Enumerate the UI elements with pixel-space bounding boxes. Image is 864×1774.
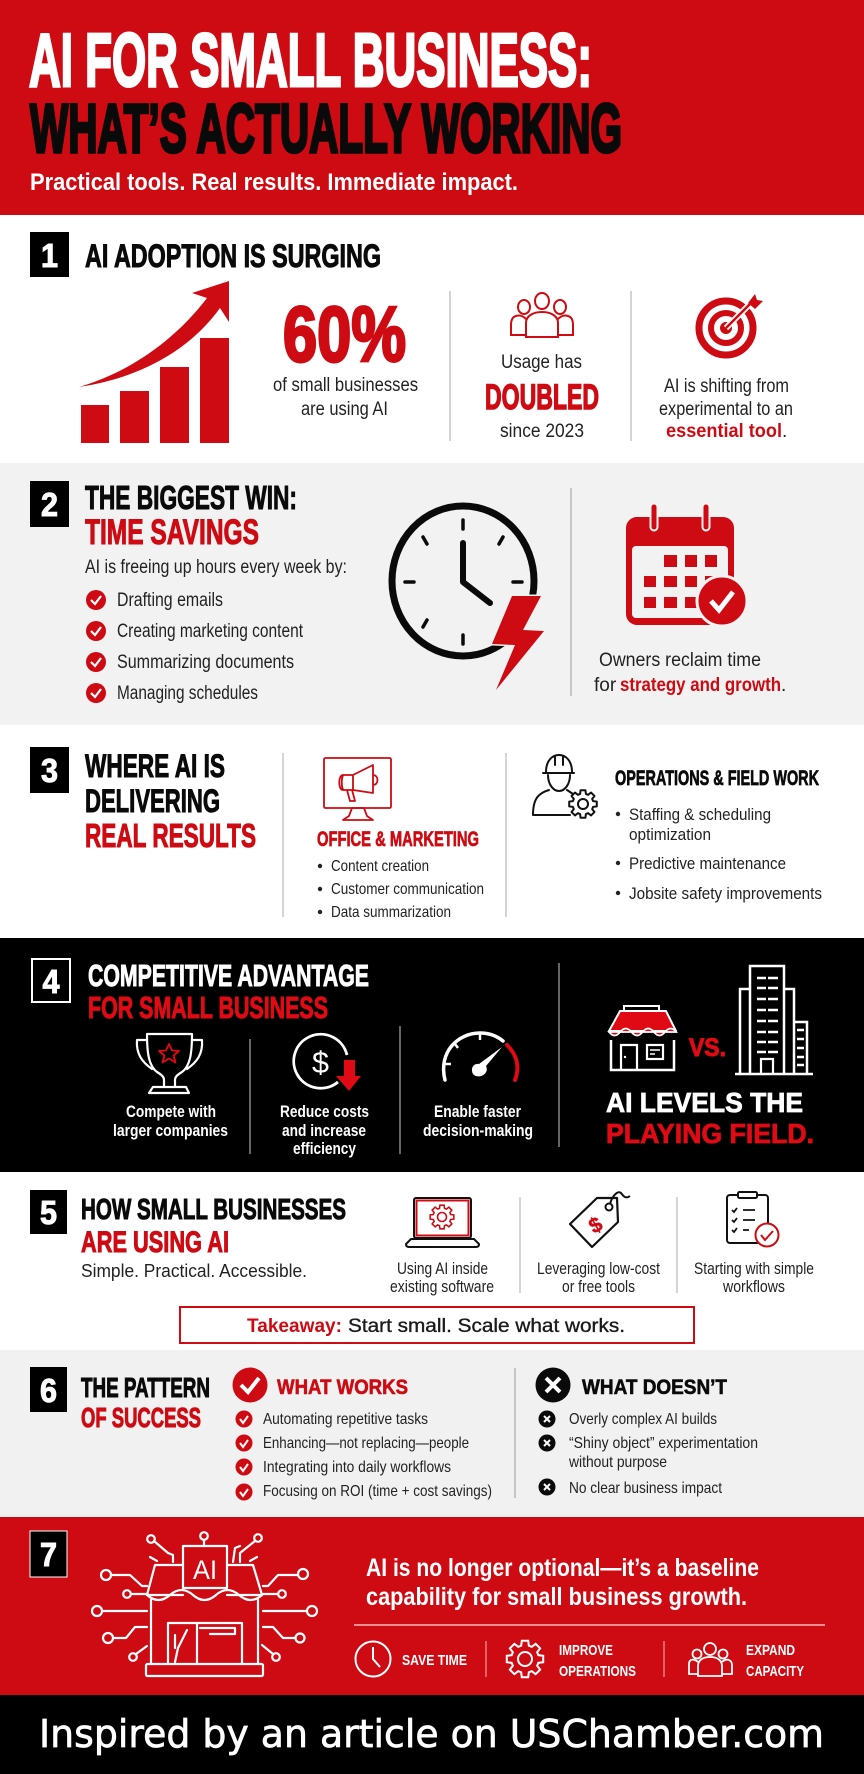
office and marketing: Content creation bbox=[331, 858, 429, 875]
stat doubled bbox=[485, 352, 599, 442]
caption: Owners reclaim time bbox=[599, 650, 761, 671]
what works list: Automating repetitive tasks bbox=[263, 1411, 428, 1428]
stat doubled: DOUBLED bbox=[485, 378, 599, 417]
caption low-cost tools: or free tools bbox=[562, 1277, 635, 1296]
icon: clipboard bbox=[727, 1192, 778, 1246]
heading: COMPETITIVE ADVANTAGE bbox=[88, 958, 369, 993]
stat 60%: of small businesses bbox=[273, 375, 418, 396]
badge 2: 2 bbox=[41, 486, 58, 523]
panel: section 6 pattern of success bbox=[0, 1350, 864, 1517]
caption: strategy and growth bbox=[620, 675, 781, 696]
what doesn't header: WHAT DOESN’T bbox=[582, 1376, 727, 1399]
badge 1: 1 bbox=[41, 237, 58, 274]
message bbox=[366, 1554, 759, 1611]
caption low-cost tools bbox=[537, 1259, 660, 1296]
stat essential tool: essential tool bbox=[666, 421, 782, 442]
subtitle: Practical tools. Real results. Immediate impact. bbox=[30, 169, 518, 196]
heading: THE PATTERN bbox=[81, 1372, 210, 1403]
what works list bbox=[236, 1410, 492, 1500]
icon: AI storefront circuit bbox=[92, 1532, 317, 1676]
operations and field work: optimization bbox=[629, 825, 711, 844]
what works list: Integrating into daily workflows bbox=[263, 1459, 451, 1476]
badge 6 bbox=[30, 1367, 67, 1412]
what doesn't list: without purpose bbox=[568, 1454, 667, 1471]
heading: TIME SAVINGS bbox=[85, 513, 259, 552]
icon: price tag bbox=[570, 1192, 630, 1247]
stat 60%: are using AI bbox=[301, 399, 388, 420]
icon: save time clock bbox=[356, 1642, 390, 1676]
panel: section 1 adoption bbox=[30, 232, 793, 443]
icon: worker with gear bbox=[533, 755, 597, 818]
panel: footer bbox=[0, 1695, 864, 1774]
heading: HOW SMALL BUSINESSES bbox=[81, 1194, 346, 1226]
checklist: Creating marketing content bbox=[117, 621, 304, 642]
panel: section 5 how businesses use AI bbox=[30, 1190, 814, 1343]
heading bbox=[88, 958, 369, 1025]
benefit compete: Compete with bbox=[126, 1102, 216, 1121]
message: capability for small business growth. bbox=[366, 1583, 747, 1611]
checklist bbox=[86, 590, 304, 704]
callout levels the field: PLAYING FIELD. bbox=[606, 1118, 814, 1149]
badge 7: 7 bbox=[40, 1536, 57, 1573]
stat doubled: since 2023 bbox=[500, 421, 584, 442]
icon: monitor megaphone bbox=[324, 758, 391, 820]
icon: clock with lightning bbox=[392, 506, 544, 690]
benefit faster decisions bbox=[423, 1102, 533, 1140]
caption software: Using AI inside bbox=[397, 1259, 488, 1278]
label expand capacity bbox=[746, 1642, 804, 1680]
label save time: SAVE TIME bbox=[402, 1652, 467, 1669]
label improve operations: OPERATIONS bbox=[559, 1663, 636, 1680]
stat essential tool: . bbox=[782, 421, 787, 442]
takeaway box bbox=[180, 1307, 694, 1343]
heading: ARE USING AI bbox=[81, 1226, 229, 1259]
icon: price tag: $ bbox=[585, 1213, 607, 1238]
operations and field work: Jobsite safety improvements bbox=[629, 884, 822, 903]
stat doubled: Usage has bbox=[501, 352, 582, 373]
vs label: VS. bbox=[689, 1034, 726, 1062]
heading bbox=[85, 748, 256, 854]
benefit reduce costs: and increase bbox=[282, 1121, 366, 1140]
stat 60%: 60% bbox=[283, 290, 406, 378]
badge 4 bbox=[32, 959, 70, 1002]
operations and field work bbox=[615, 767, 822, 903]
what works list: Focusing on ROI (time + cost savings) bbox=[263, 1483, 492, 1500]
operations and field work: Predictive maintenance bbox=[629, 854, 786, 873]
takeaway box: Start small. Scale what works. bbox=[348, 1316, 625, 1337]
intro text: AI is freeing up hours every week by: bbox=[85, 557, 347, 578]
benefit reduce costs bbox=[280, 1102, 369, 1158]
badge 7 bbox=[30, 1531, 67, 1577]
heading: DELIVERING bbox=[85, 783, 220, 819]
takeaway box: Takeaway: bbox=[247, 1316, 342, 1337]
heading bbox=[81, 1372, 210, 1433]
heading: REAL RESULTS bbox=[85, 817, 256, 854]
caption software bbox=[390, 1259, 494, 1296]
stat essential tool: experimental to an bbox=[659, 399, 793, 420]
icon: dollar down: $ bbox=[312, 1045, 329, 1080]
heading bbox=[85, 479, 297, 552]
icon: storefront bbox=[609, 1006, 676, 1070]
label improve operations: IMPROVE bbox=[559, 1642, 613, 1659]
checklist: Drafting emails bbox=[117, 590, 223, 611]
operations and field work: Staffing & scheduling bbox=[629, 805, 771, 824]
tagline: Simple. Practical. Accessible. bbox=[81, 1261, 307, 1281]
office and marketing bbox=[317, 828, 484, 921]
caption: . bbox=[781, 675, 786, 696]
heading: AI ADOPTION IS SURGING bbox=[85, 238, 381, 274]
badge 2 bbox=[30, 481, 69, 527]
badge 6: 6 bbox=[40, 1372, 57, 1409]
label expand capacity: CAPACITY bbox=[746, 1663, 804, 1680]
what doesn't list: Overly complex AI builds bbox=[569, 1411, 717, 1428]
heading bbox=[81, 1194, 346, 1259]
icon: target bbox=[699, 294, 763, 355]
benefit compete: larger companies bbox=[113, 1121, 228, 1140]
what works list: Enhancing—not replacing—people bbox=[263, 1435, 469, 1452]
icon: AI storefront circuit: AI bbox=[193, 1555, 217, 1585]
message: AI is no longer optional—it’s a baseline bbox=[366, 1554, 759, 1582]
icon: expand capacity people bbox=[689, 1643, 732, 1676]
icon: office tower bbox=[735, 966, 813, 1074]
what works header bbox=[232, 1368, 408, 1402]
heading: WHERE AI IS bbox=[85, 748, 225, 784]
office and marketing: OFFICE & MARKETING bbox=[317, 828, 479, 851]
caption simple workflows: Starting with simple bbox=[694, 1259, 814, 1278]
benefit reduce costs: efficiency bbox=[293, 1139, 356, 1158]
stat 60% bbox=[273, 290, 418, 420]
callout levels the field bbox=[606, 1087, 814, 1149]
benefit faster decisions: Enable faster bbox=[434, 1102, 521, 1121]
caption software: existing software bbox=[390, 1277, 494, 1296]
icon: improve gear bbox=[507, 1641, 543, 1677]
badge 5: 5 bbox=[40, 1194, 57, 1231]
icon: calendar bbox=[626, 507, 747, 626]
what doesn't list bbox=[538, 1410, 758, 1497]
callout levels the field: AI LEVELS THE bbox=[606, 1087, 803, 1118]
heading: THE BIGGEST WIN: bbox=[85, 479, 297, 516]
panel: section 4 competitive advantage bbox=[0, 938, 864, 1172]
benefit reduce costs: Reduce costs bbox=[280, 1102, 369, 1121]
icon: dollar down bbox=[294, 1034, 361, 1091]
panel: section 2 time savings bbox=[0, 463, 864, 725]
footer credit: Inspired by an article on USChamber.com bbox=[39, 1712, 824, 1756]
caption simple workflows bbox=[694, 1259, 814, 1296]
what works header: WHAT WORKS bbox=[277, 1376, 408, 1399]
stat essential tool bbox=[659, 376, 793, 442]
office and marketing: Data summarization bbox=[331, 904, 451, 921]
checklist: Summarizing documents bbox=[117, 652, 294, 673]
benefit compete bbox=[113, 1102, 228, 1140]
panel: section 7 conclusion bbox=[0, 1517, 864, 1695]
icon: trophy bbox=[137, 1034, 202, 1093]
panel: header bbox=[0, 0, 864, 215]
icon: speedometer bbox=[444, 1033, 517, 1080]
heading: FOR SMALL BUSINESS bbox=[88, 990, 328, 1025]
heading: OF SUCCESS bbox=[81, 1402, 201, 1433]
badge 3 bbox=[30, 747, 69, 793]
icon: people bbox=[511, 293, 573, 337]
icon: laptop bbox=[406, 1198, 479, 1247]
icon: growth chart bbox=[79, 281, 229, 443]
panel: section 3 where AI delivers bbox=[30, 747, 822, 921]
label improve operations bbox=[559, 1642, 636, 1680]
caption simple workflows: workflows bbox=[722, 1277, 785, 1296]
stat essential tool: AI is shifting from bbox=[664, 376, 789, 397]
office and marketing: Customer communication bbox=[331, 881, 484, 898]
what doesn't list: “Shiny object” experimentation bbox=[569, 1435, 758, 1452]
caption low-cost tools: Leveraging low-cost bbox=[537, 1259, 660, 1278]
badge 3: 3 bbox=[41, 752, 58, 789]
caption: for bbox=[594, 675, 617, 696]
badge 1 bbox=[30, 232, 69, 277]
checklist: Managing schedules bbox=[117, 683, 258, 704]
what doesn't header bbox=[536, 1368, 727, 1402]
benefit faster decisions: decision-making bbox=[423, 1121, 533, 1140]
caption bbox=[594, 650, 786, 696]
badge 4: 4 bbox=[42, 963, 60, 1000]
label expand capacity: EXPAND bbox=[746, 1642, 795, 1659]
what doesn't list: No clear business impact bbox=[569, 1480, 722, 1497]
badge 5 bbox=[30, 1190, 67, 1234]
